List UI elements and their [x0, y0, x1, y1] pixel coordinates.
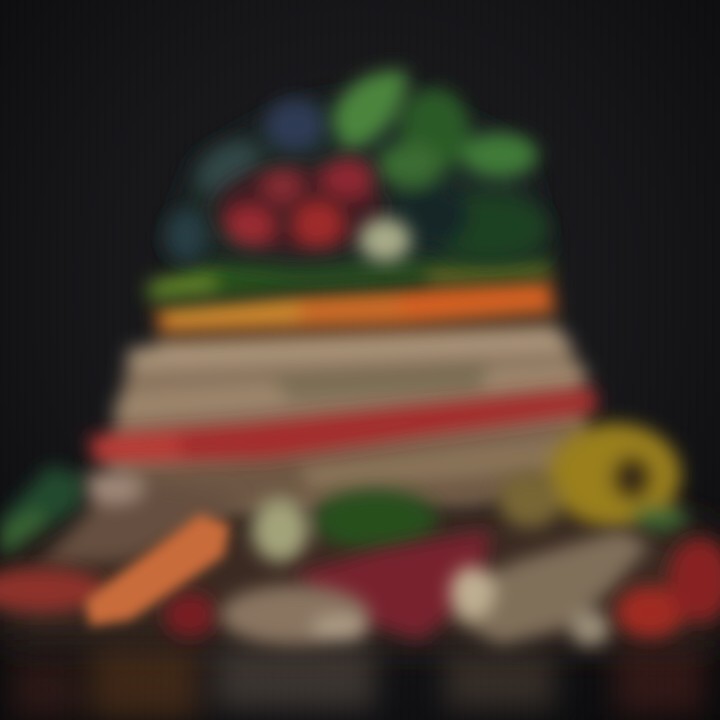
ginger root	[450, 530, 650, 646]
pyramid layer: lower beige band	[115, 425, 580, 515]
blue-grey leaves	[166, 99, 325, 262]
red berries	[215, 158, 385, 254]
beige grain, bottom	[220, 585, 370, 645]
dark shadow mass under lower foods	[0, 500, 720, 640]
carrot	[85, 514, 230, 626]
pyramid layer: green band	[145, 245, 552, 303]
yellow sunflower	[498, 423, 688, 530]
dark foliage mass behind the top	[165, 90, 550, 270]
pyramid layer: orange band	[155, 280, 556, 334]
white vegetable	[359, 218, 411, 262]
pyramid layer: red band	[88, 388, 598, 464]
centre green and white vegetables	[252, 490, 437, 562]
left green leaves	[0, 465, 88, 558]
green leaves	[332, 71, 548, 262]
table reflection	[10, 650, 705, 720]
centre red food	[295, 530, 490, 640]
tomatoes	[616, 538, 720, 638]
red food, left	[0, 568, 216, 637]
pyramid layer: beige grain base	[105, 322, 588, 505]
beige food pile, left	[40, 470, 240, 565]
